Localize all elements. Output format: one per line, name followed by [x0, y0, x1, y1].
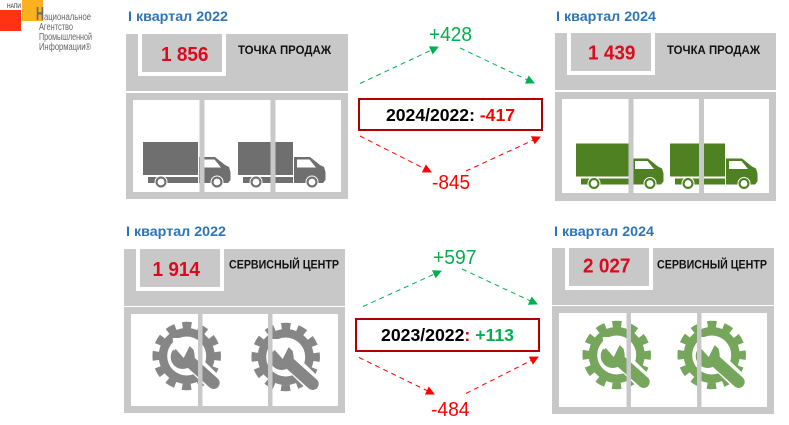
callout: 2023/2022: 2023/2022: +113: [381, 325, 514, 345]
callout: 2023/2022: [356, 319, 539, 351]
delta: plus 428: +428: [429, 24, 472, 46]
logo: Промышленной: [39, 32, 92, 43]
header band: [126, 34, 348, 91]
label: СЕРВИСНЫЙ ЦЕНТР: [657, 257, 767, 272]
logo: ациональное: [44, 12, 91, 23]
image frame with gears: [552, 306, 774, 414]
image frame with trucks: [126, 93, 348, 199]
icon: truck: [576, 144, 664, 190]
heading: Q1 2024 service: I квартал 2024: [554, 223, 654, 239]
arrow: red down: [360, 136, 431, 172]
label: ТОЧКА ПРОДАЖ: [238, 43, 331, 57]
icon: truck: [238, 142, 326, 188]
label: СЕРВИСНЫЙ ЦЕНТР: [229, 257, 339, 272]
icon: gear and wrench: [681, 324, 746, 388]
heading: Q1 2022 sales: I квартал 2022: [128, 8, 228, 24]
icon: truck: [670, 144, 758, 190]
panel: sales points Q1 2024: [555, 8, 776, 201]
value box: 1 439: [588, 42, 636, 64]
comparison: sales points: [359, 24, 542, 194]
value box: [567, 33, 655, 75]
icon: gear and wrench: [156, 325, 221, 389]
value box: 1 914: [152, 258, 201, 281]
value box: [138, 34, 226, 76]
logo: Информации®: [39, 41, 91, 53]
arrow: red up: [466, 137, 540, 171]
comparison: service centres: [356, 247, 539, 421]
panel: service centres Q1 2024: [552, 223, 774, 414]
arrow: green down: [460, 48, 534, 83]
arrow: green up: [363, 271, 441, 306]
panel: sales points Q1 2022: [126, 8, 348, 199]
arrow: red up: [466, 357, 538, 394]
label: ТОЧКА ПРОДАЖ: [667, 43, 760, 57]
delta: minus 845: -845: [432, 172, 470, 194]
logo: Агентство: [39, 22, 73, 33]
header band: [124, 249, 345, 306]
icon: gear and wrench: [255, 326, 320, 390]
heading: Q1 2022 service: I квартал 2022: [126, 223, 226, 239]
logo: Н: [36, 4, 44, 24]
logo: НАПИ: [7, 4, 21, 10]
arrow: green up: [360, 47, 438, 84]
logo: [0, 0, 92, 53]
callout: 2024/2022: 2024/2022: -417: [386, 105, 515, 125]
arrow: red down: [359, 358, 434, 394]
heading: Q1 2024 sales: I квартал 2024: [556, 8, 656, 24]
icon: gear and wrench: [586, 324, 651, 388]
value box: [565, 248, 653, 290]
value box: 2 027: [583, 254, 630, 277]
value box: 1 856: [161, 43, 208, 66]
image frame with trucks: [555, 92, 776, 201]
panel: service centres Q1 2022: [124, 223, 345, 413]
image frame with gears: [124, 307, 345, 413]
icon: truck: [143, 142, 230, 188]
value box: [136, 249, 224, 291]
delta: plus 597: +597: [433, 247, 476, 269]
arrow: green down: [462, 269, 537, 304]
delta: minus 484: -484: [431, 399, 470, 421]
header band: [552, 248, 774, 305]
header band: [555, 33, 776, 90]
callout: 2024/2022: [359, 99, 542, 130]
